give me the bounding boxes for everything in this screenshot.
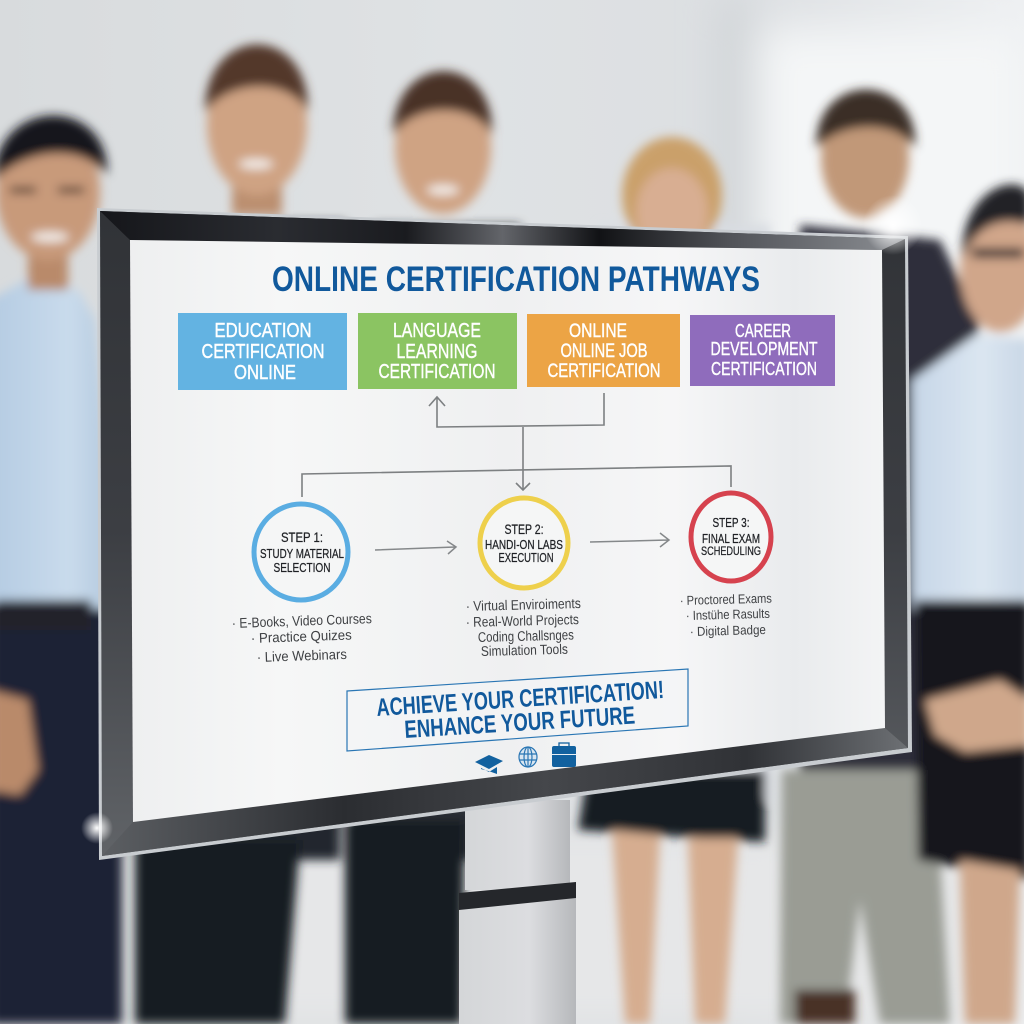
person 5: man on the right in dark top: [780, 89, 978, 1024]
category: career: CERTIFICATION: [711, 359, 817, 379]
step 2 bullet list: Simulation Tools: [481, 641, 568, 659]
category: online job: ONLINE JOB: [560, 341, 648, 362]
category: education: [178, 313, 347, 390]
icon: globe: [519, 747, 537, 767]
monitor frame: [100, 211, 908, 856]
step 1 bullet list: · E-Books, Video Courses: [232, 610, 372, 631]
call to action banner: ENHANCE YOUR FUTURE: [404, 702, 636, 744]
step 1: SELECTION: [274, 560, 330, 575]
step 3 bullet list: · Proctored Exams: [680, 591, 772, 608]
monitor: [97, 208, 912, 860]
category: online job: CERTIFICATION: [548, 361, 660, 382]
category: language: LANGUAGE: [393, 320, 481, 342]
step 2: STEP 2:: [504, 521, 544, 537]
step 2 bullet list: · Real-World Projects: [466, 611, 579, 630]
category: career: DEVELOPMENT: [710, 339, 818, 359]
call to action banner: ACHIEVE YOUR CERTIFICATION!: [376, 676, 665, 722]
step 2: EXECUTION: [498, 550, 554, 565]
category: education: CERTIFICATION: [202, 341, 324, 363]
step 3 bullet list: [680, 591, 772, 639]
icon: graduation cap: [475, 755, 503, 774]
monitor stand post: [459, 800, 576, 1024]
step 2 bullet list: Coding Challsnges: [478, 626, 574, 645]
category: career: [690, 315, 835, 386]
category: online job: ONLINE: [569, 321, 627, 342]
person 3: man, centre: [345, 71, 520, 1024]
step 3 bullet list: · Instühe Rasults: [686, 606, 770, 623]
step 2 bullet list: [466, 595, 581, 659]
category: language: [358, 313, 517, 389]
step 1 bullet list: · Live Webinars: [257, 646, 347, 665]
category: language: CERTIFICATION: [378, 361, 496, 383]
step 3 bullet list: · Digital Badge: [690, 622, 766, 639]
person 6: woman with glasses on the right edge: [912, 184, 1024, 1024]
category: online job: [527, 314, 680, 387]
call to action banner: [347, 669, 688, 751]
step 3: SCHEDULING: [701, 544, 761, 558]
lens flare top right: [863, 195, 923, 255]
step 2: [480, 498, 568, 588]
step 1 bullet list: [232, 610, 372, 665]
bottom frame reflection: [102, 728, 908, 856]
step 2 bullet list: · Virtual Enviroiments: [466, 595, 581, 614]
icon: briefcase: [552, 743, 576, 767]
category: education: EDUCATION: [214, 320, 312, 342]
category: education: ONLINE: [234, 362, 296, 384]
arrow step 2 to step 3: [590, 533, 669, 547]
step 1: STUDY MATERIAL: [260, 546, 344, 561]
arrow step 1 to step 2: [375, 541, 456, 554]
title: ONLINE CERTIFICATION PATHWAYS: [272, 260, 760, 299]
person 2: man, second from left: [135, 44, 345, 1024]
step 2: HANDI-ON LABS: [485, 537, 563, 552]
category: language: LEARNING: [396, 341, 478, 363]
screen: [130, 240, 885, 822]
step 3: FINAL EXAM: [702, 531, 760, 546]
connector arrows between categories and steps: [302, 393, 731, 497]
top frame reflection: [100, 211, 905, 250]
step 3: STEP 3:: [712, 515, 750, 530]
step 1 bullet list: · Practice Quizes: [251, 626, 352, 646]
person 4: woman with blond hair: [578, 137, 770, 1024]
monitor outer bezel: [97, 208, 912, 860]
step 1: STEP 1:: [281, 529, 323, 545]
step 1: [254, 504, 348, 600]
person 1: man on the left: [0, 116, 122, 1024]
category: career: CAREER: [735, 321, 791, 341]
lens flare bottom left: [81, 812, 113, 844]
step 3: [691, 493, 771, 581]
